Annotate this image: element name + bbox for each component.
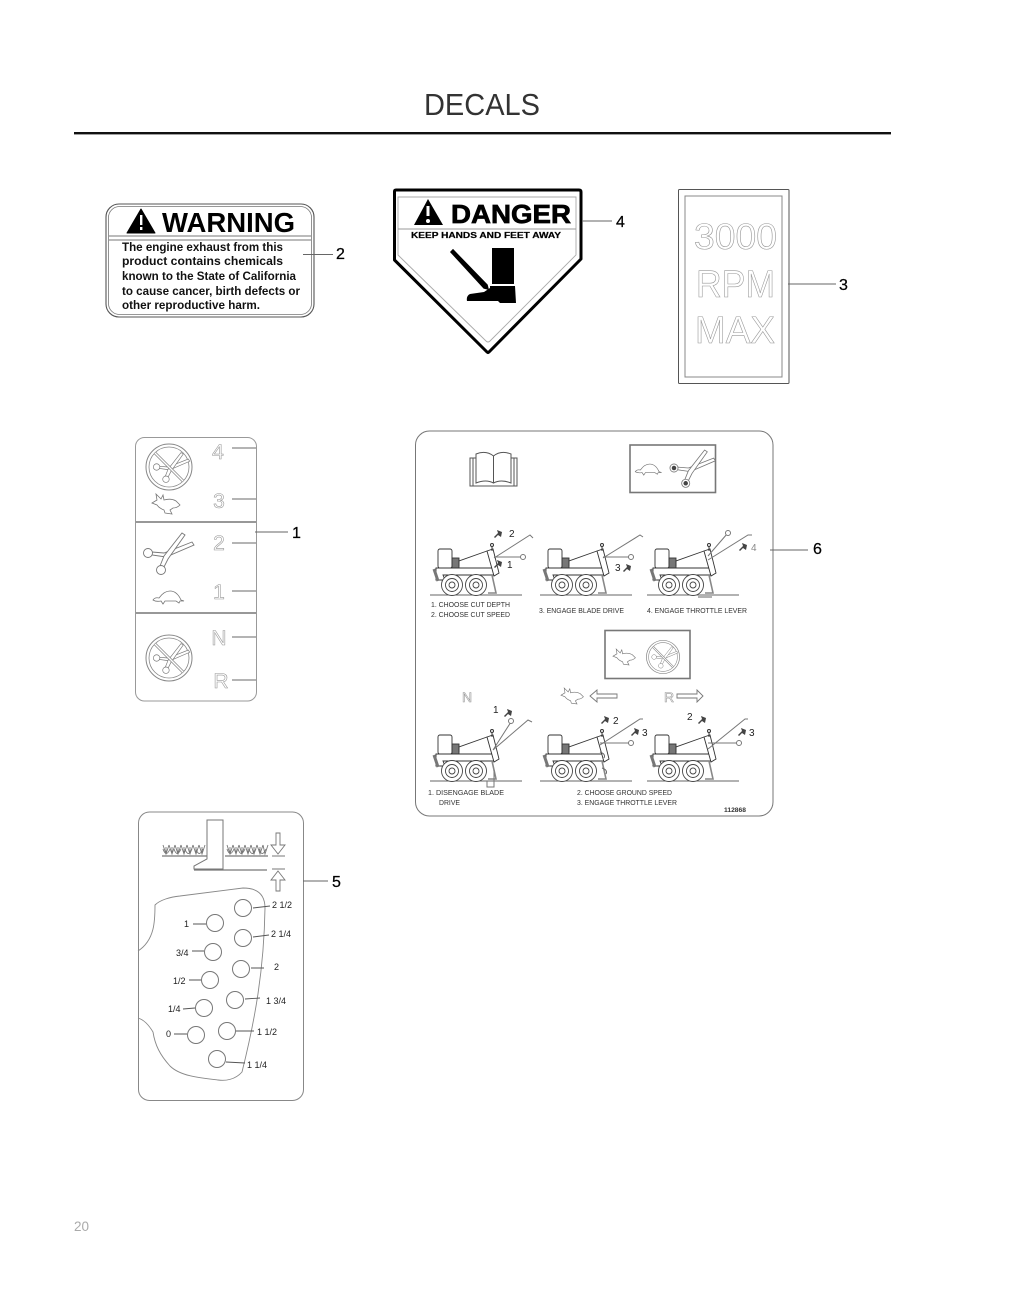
callout 6: [770, 541, 822, 558]
callout 4: [582, 214, 625, 231]
mower: step 3: 3: [615, 563, 621, 574]
panel: speed selector decal: 2: [213, 532, 225, 555]
callout 4: 4: [616, 214, 625, 231]
box: turtle and scissors: [630, 445, 716, 492]
instructions: upper row: 3. ENGAGE BLADE DRIVE: [539, 608, 624, 615]
callout 1: 1: [292, 525, 301, 542]
hole labels: 2 1/4: [271, 929, 291, 939]
icon: turtle: [153, 591, 184, 604]
panel: RPM decal: MAX: [695, 310, 775, 352]
panel: warning decal: [106, 204, 314, 317]
panel: cut height decal: [138, 812, 304, 1100]
warning text: to cause cancer, birth defects or: [122, 284, 300, 298]
hole labels: 3/4: [176, 948, 189, 958]
R mode label with right arrow: [664, 689, 703, 705]
warning text: other reproductive harm.: [122, 298, 260, 312]
icon: grass: [162, 845, 268, 856]
instructions: lower row: 1. DISENGAGE BLADE: [428, 790, 504, 797]
panel: RPM decal: RPM: [696, 264, 775, 306]
warning text: The engine exhaust from this: [122, 240, 283, 254]
hole labels: 1/2: [173, 976, 186, 986]
mower: forward: 3: [642, 728, 648, 739]
instructions: lower row: 3. ENGAGE THROTTLE LEVER: [577, 800, 677, 807]
instructions: lower row: [428, 790, 677, 807]
instructions: lower row: 2. CHOOSE GROUND SPEED: [577, 790, 672, 797]
panel: speed selector decal: R: [213, 670, 229, 693]
panel: RPM decal: [678, 190, 789, 384]
icon: scissors: [144, 533, 194, 574]
mower: step 4: [647, 530, 757, 597]
callout 6: 6: [813, 541, 822, 558]
mower: reverse: [647, 712, 755, 782]
callout 2: 2: [336, 246, 345, 263]
callout 1: [255, 525, 301, 542]
panel: speed selector decal: 4: [212, 441, 224, 464]
instructions: lower row: DRIVE: [439, 800, 460, 807]
hole labels: 2: [274, 962, 279, 972]
warning text: known to the State of California: [122, 269, 296, 283]
hole labels: 2 1/2: [272, 900, 292, 910]
instructions: upper row: 2. CHOOSE CUT SPEED: [431, 612, 510, 619]
title: DECALS: [424, 88, 540, 122]
danger subheading: KEEP HANDS AND FEET AWAY: [411, 231, 562, 240]
mower: step 1 and 2: [430, 529, 533, 596]
warning text: [122, 240, 300, 312]
mower: step 4: 4: [751, 543, 757, 554]
N mode label: N: [462, 689, 472, 705]
icon: blade height: [194, 820, 223, 869]
panel: speed selector decal: [136, 438, 256, 701]
danger heading: DANGER: [451, 199, 571, 229]
callout 3: [788, 277, 848, 294]
panel: RPM decal: 3000: [694, 216, 777, 257]
page number: 20: [74, 1219, 89, 1234]
callout 2: [303, 246, 345, 263]
instructions: upper row: [431, 602, 747, 619]
icon: height arrows: [271, 833, 285, 891]
mower: forward: [540, 716, 648, 782]
mower: forward: 2: [613, 716, 619, 727]
panel: speed selector decal: 3: [213, 490, 225, 513]
plate outline: [138, 888, 265, 1080]
mower: neutral: [430, 705, 532, 787]
mower: neutral: 1: [493, 705, 499, 716]
hole labels: 1 3/4: [266, 996, 286, 1006]
icon: no blade lower: [146, 635, 192, 681]
R mode label with right arrow: R: [664, 689, 674, 705]
callout 5: 5: [332, 874, 341, 891]
panel: operating instructions decal: [416, 431, 773, 816]
callout 3: 3: [839, 277, 848, 294]
panel: danger decal: [394, 190, 581, 352]
mower: step 3: [540, 535, 643, 596]
instructions: upper row: 4. ENGAGE THROTTLE LEVER: [647, 608, 747, 615]
panel: speed selector decal: 1: [213, 581, 225, 604]
panel: speed selector decal: N: [211, 627, 227, 650]
hole labels: 1: [184, 919, 189, 929]
adjustment holes: [188, 900, 252, 1068]
icon: manual book: [470, 452, 517, 486]
hole labels: 1 1/2: [257, 1027, 277, 1037]
callout 5: [303, 874, 341, 891]
box: rabbit and no blade: [605, 630, 690, 678]
warning text: product contains chemicals: [122, 254, 283, 268]
instructions: upper row: 1. CHOOSE CUT DEPTH: [431, 602, 510, 609]
mower: step 1 and 2: 2: [509, 529, 515, 540]
part number: 112868: [724, 808, 747, 814]
hole labels: 0: [166, 1029, 171, 1039]
warning heading: WARNING: [162, 207, 295, 238]
hole leader lines: [174, 906, 270, 1063]
hole labels: 1/4: [168, 1004, 181, 1014]
hole labels: [166, 900, 292, 1070]
icon: rabbit with left arrow: [561, 688, 617, 704]
icon: blade: [451, 250, 488, 289]
icon: rabbit: [152, 494, 180, 514]
mower: reverse: 3: [749, 728, 755, 739]
icon: boot: [467, 248, 516, 303]
mower: step 1 and 2: 1: [507, 560, 513, 571]
mower: reverse: 2: [687, 712, 693, 723]
icon: danger triangle: [414, 199, 443, 225]
icon: no blade: [146, 444, 192, 490]
icon: warning triangle: [127, 209, 155, 233]
hole labels: 1 1/4: [247, 1060, 267, 1070]
